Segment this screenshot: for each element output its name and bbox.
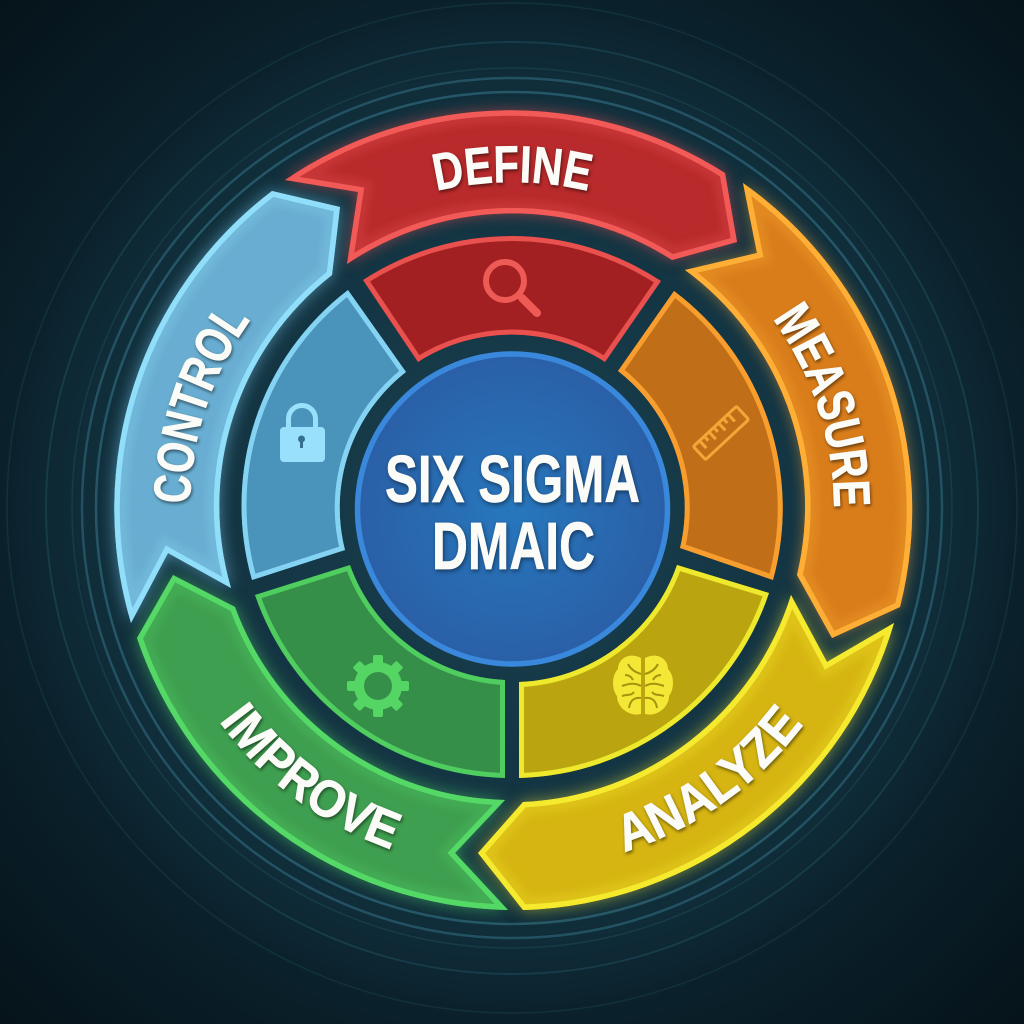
label: ANALYZE: ANALYZE (622, 703, 806, 856)
arrow segment: Analyze (471, 592, 900, 920)
label: MEASURE: MEASURE (774, 300, 874, 510)
title line: SIX SIGMA: SIX SIGMA (385, 442, 640, 517)
inner wedge: Define (363, 236, 661, 362)
label: DEFINE: DEFINE (432, 146, 596, 194)
label: IMPROVE: IMPROVE (220, 702, 404, 852)
inner wedge: Control (242, 290, 406, 580)
inner wedge: Measure (618, 291, 783, 580)
arrow segment: Measure (682, 180, 922, 644)
icon: brain (613, 656, 673, 715)
center circle (358, 354, 668, 664)
inner wedge: Analyze (519, 565, 769, 778)
title line: DMAIC: DMAIC (432, 509, 595, 584)
label: CONTROL: CONTROL (152, 312, 252, 506)
icon: padlock (280, 406, 325, 462)
arrow segment: Define (283, 101, 744, 268)
icon: ruler (693, 406, 749, 460)
icon: gear (347, 655, 409, 717)
icon: magnifying glass (486, 262, 537, 313)
arrow segment: Control (104, 183, 348, 624)
inner wedge: Improve (255, 565, 505, 778)
arrow segment: Improve (130, 570, 510, 919)
